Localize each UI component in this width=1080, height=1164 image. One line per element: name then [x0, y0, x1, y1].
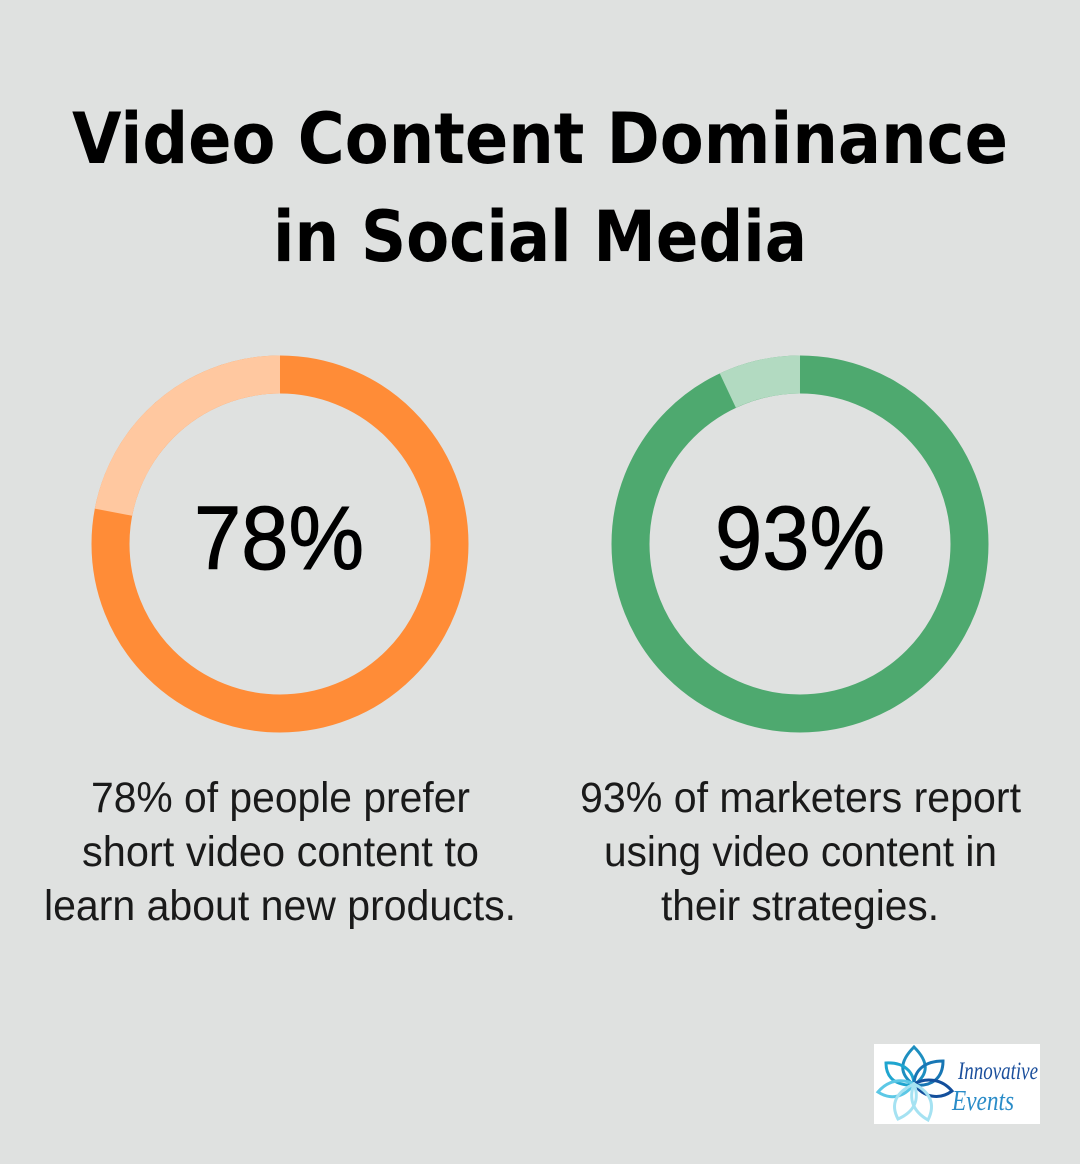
description: 78%: [44, 774, 516, 930]
panel: 78% statistic: [44, 374, 516, 930]
title: in Social Media: [273, 196, 807, 278]
value: 93%: 93%: [715, 489, 885, 589]
wordmark: Events: [951, 1086, 1014, 1117]
description: 78%: short video content to: [82, 828, 479, 876]
title: Video Content Dominance: [72, 98, 1008, 180]
donut chart: 93%: [630, 374, 970, 714]
wordmark: Innovative: [957, 1058, 1038, 1085]
value: 78%: 78%: [194, 489, 364, 589]
description: 78%: learn about new products.: [44, 882, 516, 930]
description: 78%: 78% of people prefer: [91, 774, 470, 822]
panel: 93% statistic: [580, 374, 1021, 930]
description: 93%: 93% of marketers report: [580, 774, 1021, 822]
title: [72, 98, 1008, 278]
icon: lotus flower: [878, 1047, 952, 1120]
description: 93%: their strategies.: [661, 882, 939, 930]
logo: Innovative Events: [874, 1044, 1040, 1124]
wordmark: [951, 1058, 1038, 1117]
donut chart: 78%: [110, 374, 450, 714]
description: 93%: [580, 774, 1021, 930]
description: 93%: using video content in: [604, 828, 997, 876]
